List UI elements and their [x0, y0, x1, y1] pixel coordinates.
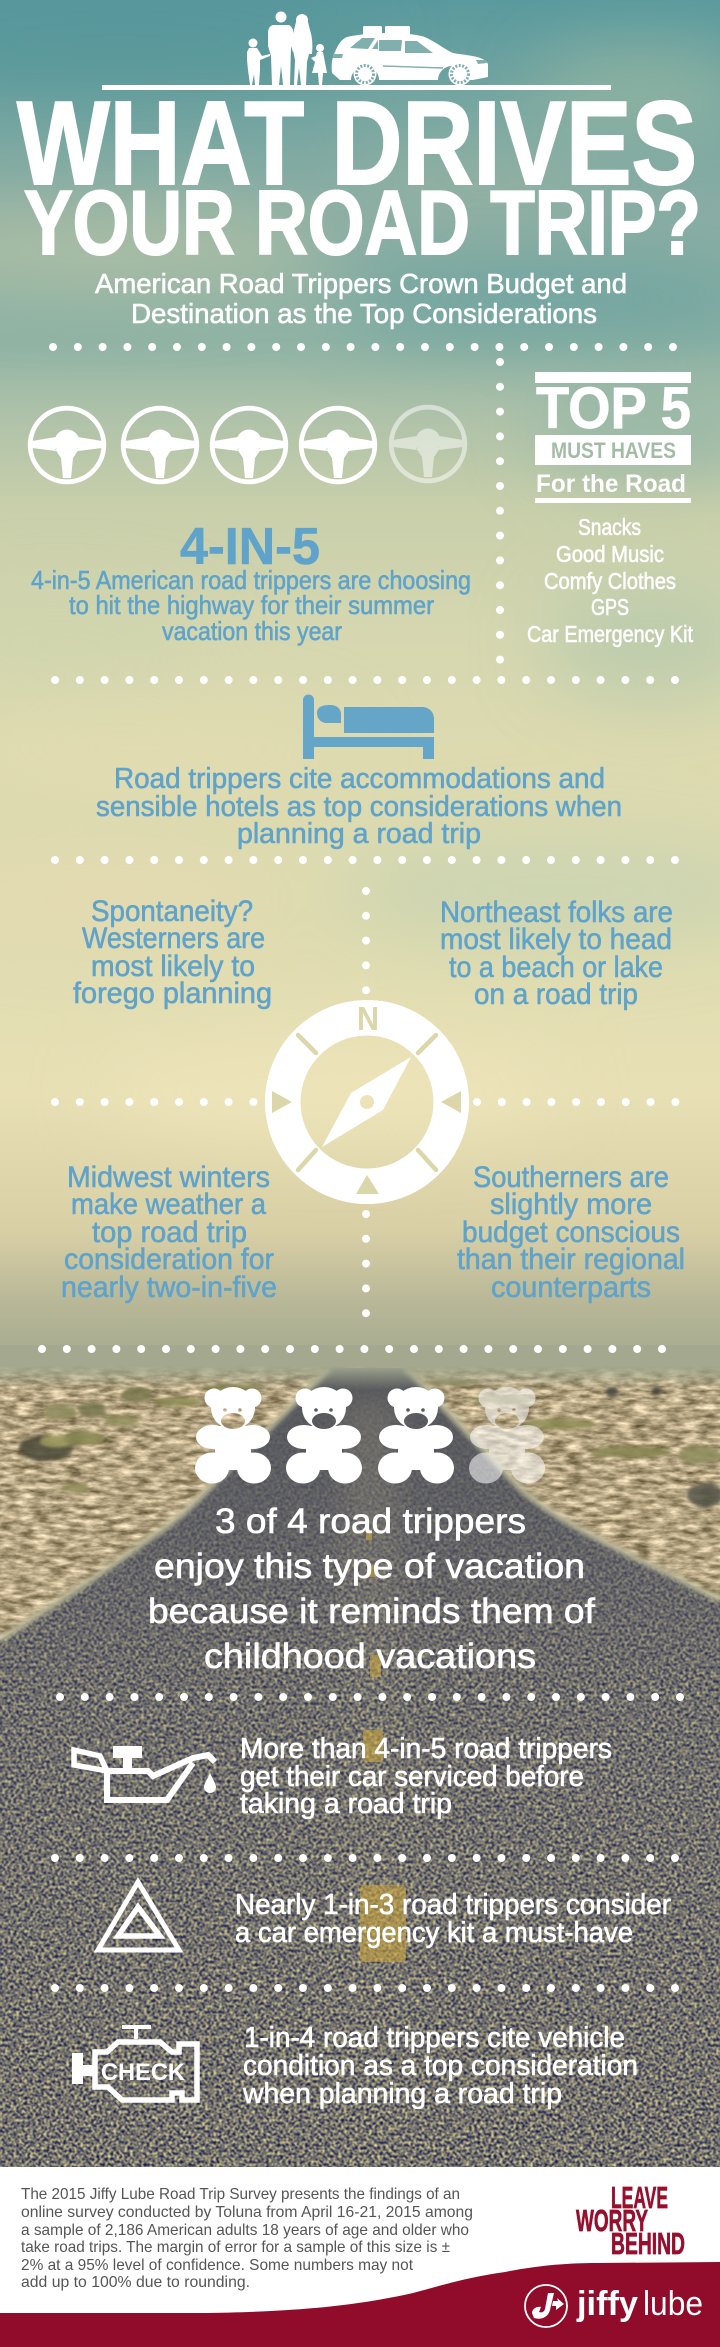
icon: check engine: CHECK — [101, 2059, 186, 2086]
text: car serviced: More than 4-in-5 road trippers — [240, 1733, 612, 1765]
text: northeast: Northeast folks are — [440, 896, 673, 929]
footnote: take road trips. The margin of error for a sample of this size is ± — [21, 2239, 450, 2256]
text: northeast: on a road trip — [474, 978, 638, 1011]
description: vacation this year — [162, 616, 342, 646]
text: vehicle condition — [242, 2022, 638, 2110]
text: westerners: Westerners are — [82, 922, 265, 955]
text: northeast — [440, 896, 673, 1011]
text: childhood vacations — [148, 1502, 595, 1676]
slogan: WORRY — [576, 2203, 648, 2238]
list of must haves: Car Emergency Kit — [527, 621, 694, 647]
car — [332, 26, 488, 86]
text: accommodations: sensible hotels as top considerations when — [96, 791, 622, 823]
big number: 4-IN-5 — [180, 518, 320, 576]
text: midwest: consideration for — [64, 1243, 274, 1276]
list of must haves: Snacks — [578, 514, 641, 540]
icon: oil can — [74, 1746, 216, 1800]
logo: jiffy lube — [525, 2285, 703, 2327]
text: southerners: slightly more — [490, 1188, 652, 1221]
text: childhood vacations: enjoy this type of vacation — [154, 1547, 585, 1586]
text: southerners: Southerners are — [473, 1161, 669, 1194]
text: car serviced — [240, 1733, 612, 1820]
list of must haves: Comfy Clothes — [544, 568, 676, 594]
footnote: add up to 100% due to rounding. — [21, 2274, 250, 2291]
icon: compass — [265, 1000, 469, 1204]
compass markings — [272, 1000, 461, 1194]
footnote: 2% at a 95% level of confidence. Some numbers may not — [21, 2257, 414, 2274]
text: childhood vacations: because it reminds them of — [148, 1592, 595, 1631]
text: car serviced: get their car serviced before — [240, 1761, 584, 1793]
footnote: online survey conducted by Toluna from April 16-21, 2015 among — [21, 2204, 473, 2221]
text: southerners: budget conscious — [462, 1216, 680, 1249]
text: car serviced: taking a road trip — [240, 1788, 452, 1820]
needle — [322, 1057, 411, 1147]
text: westerners: most likely to — [91, 950, 255, 983]
steering wheel icons: 4 of 5 — [30, 407, 465, 482]
subtitle: Destination as the Top Considerations — [131, 298, 597, 329]
compass markings: N — [357, 1000, 379, 1037]
text: midwest: Midwest winters — [67, 1161, 270, 1194]
description: 4-in-5 American road trippers are choosing — [31, 565, 471, 595]
text: northeast: most likely to head — [440, 923, 672, 956]
icon: teddy bears 3 of 4 — [195, 1387, 545, 1484]
text: accommodations: Road trippers cite accommodations and — [114, 763, 605, 795]
for the road: For the Road — [536, 470, 686, 498]
text: vehicle condition: 1-in-4 road trippers cite vehicle — [244, 2022, 625, 2054]
list of must haves: Good Music — [556, 541, 664, 567]
text: midwest — [61, 1161, 277, 1304]
list of must haves — [527, 514, 694, 647]
icon: check engine — [72, 2025, 197, 2100]
description — [31, 565, 471, 646]
text: southerners: than their regional — [457, 1243, 685, 1276]
red wave — [0, 2262, 720, 2347]
text: southerners: counterparts — [491, 1271, 651, 1304]
title — [17, 77, 701, 274]
text: emergency kit: Nearly 1-in-3 road trippers consider — [235, 1889, 671, 1921]
panel: top 5 must haves — [527, 372, 694, 647]
slogan: LEAVE — [611, 2180, 668, 2215]
footnote: a sample of 2,186 American adults 18 years of age and older who — [21, 2222, 469, 2239]
text: childhood vacations: childhood vacations — [204, 1637, 536, 1676]
logo: jiffy lube: lube — [643, 2285, 703, 2323]
footnote — [21, 2186, 473, 2291]
subtitle: American Road Trippers Crown Budget and — [95, 268, 627, 299]
footnote: The 2015 Jiffy Lube Road Trip Survey presents the findings of an — [21, 2186, 460, 2203]
text: midwest: make weather a — [71, 1188, 266, 1221]
text: accommodations — [96, 763, 622, 850]
illustration: family and car — [102, 12, 611, 90]
panel: footer — [0, 2167, 720, 2347]
ground line — [102, 85, 611, 90]
subtitle — [95, 268, 627, 329]
text: emergency kit: a car emergency kit a must-have — [235, 1917, 633, 1949]
text: northeast: to a beach or lake — [449, 951, 663, 984]
text: westerners: Spontaneity? — [91, 895, 253, 928]
text: midwest: nearly two-in-five — [61, 1271, 277, 1304]
text: midwest: top road trip — [92, 1216, 247, 1249]
slogan — [576, 2180, 685, 2261]
must haves badge: MUST HAVES — [551, 438, 676, 463]
text: westerners: forego planning — [73, 977, 272, 1010]
description: to hit the highway for their summer — [69, 590, 434, 620]
logo: jiffy lube: jiffy — [576, 2285, 638, 2323]
icon: warning triangle — [98, 1882, 179, 1950]
stat: 4-in-5 — [31, 518, 471, 646]
list of must haves: GPS — [591, 594, 629, 620]
text: accommodations: planning a road trip — [237, 818, 481, 850]
family silhouettes — [247, 12, 327, 85]
text: emergency kit — [235, 1889, 671, 1949]
text: vehicle condition: when planning a road trip — [242, 2078, 562, 2110]
text: westerners — [73, 895, 272, 1010]
text: childhood vacations: 3 of 4 road trippers — [215, 1502, 526, 1541]
top 5 heading: TOP 5 — [536, 376, 691, 441]
text: vehicle condition: condition as a top consideration — [243, 2050, 638, 2082]
icon: bed — [303, 694, 434, 759]
text: southerners — [457, 1161, 685, 1304]
